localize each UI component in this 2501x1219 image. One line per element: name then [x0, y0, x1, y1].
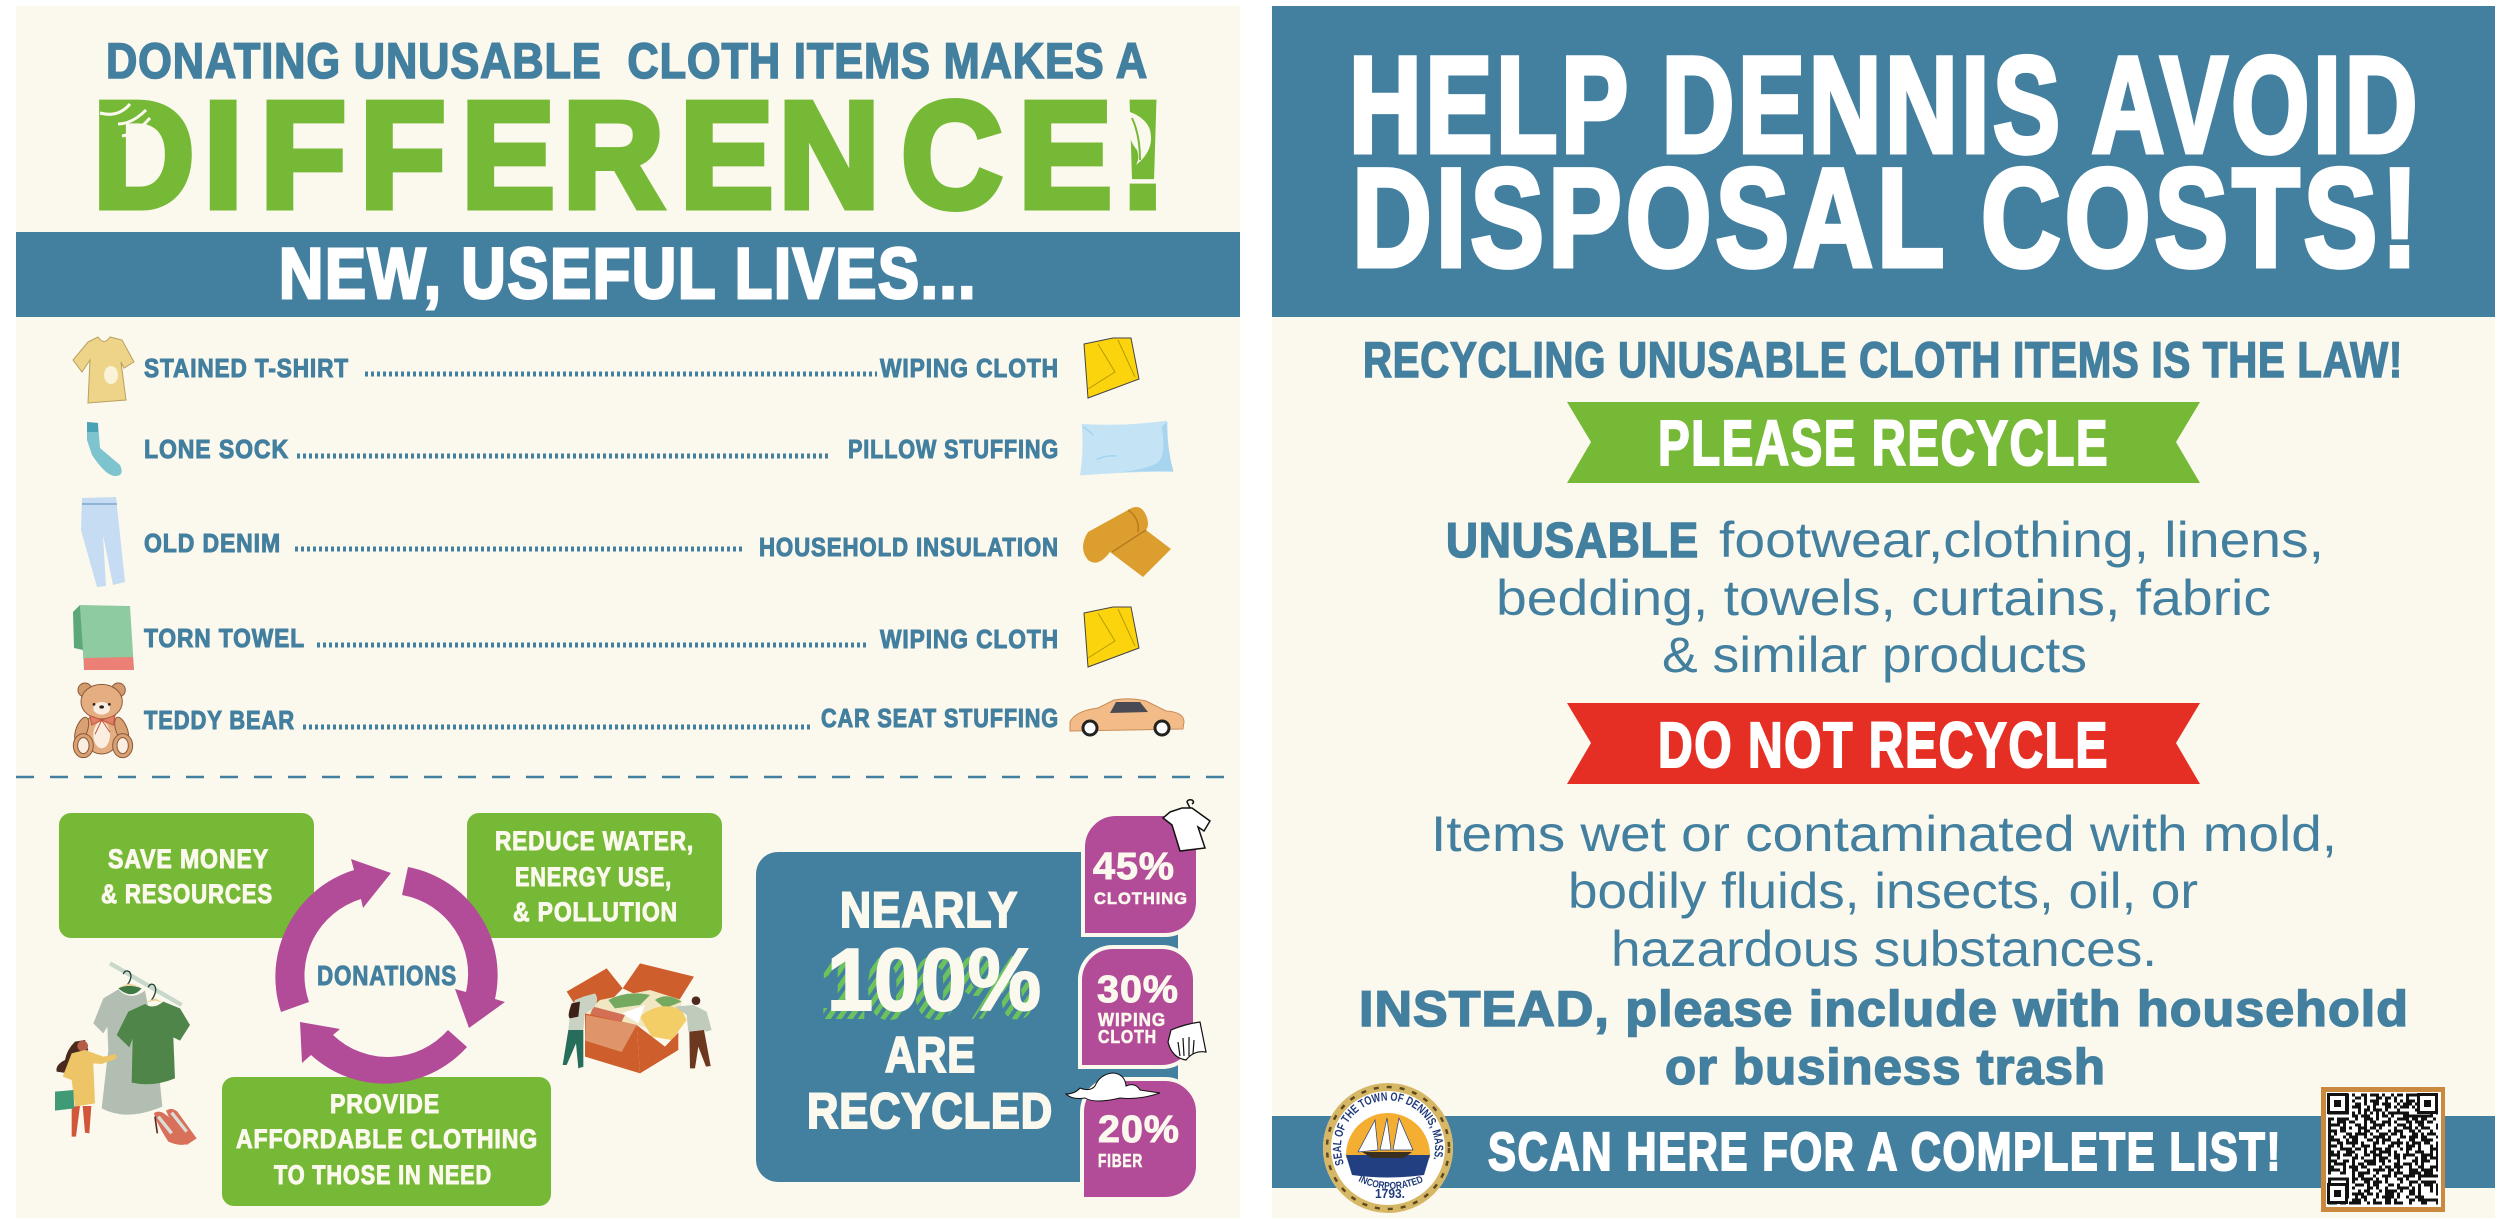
row: old denim to household insulation [81, 497, 1171, 587]
row: teddy bear to car seat stuffing: CAR SEAT STUFFING [821, 703, 1059, 733]
callout: affordable clothing [222, 1077, 551, 1206]
callout: save money [59, 813, 314, 938]
illustration: people filling donation box [563, 963, 712, 1073]
row: torn towel to wiping cloth: WIPING CLOTH [880, 624, 1059, 654]
donations cycle arrows [275, 859, 505, 1084]
text block: recyclable items: footwear,clothing, linens, [1719, 512, 2324, 568]
ribbon: please recycle: PLEASE RECYCLE [1658, 407, 2109, 479]
row: stained t-shirt to wiping cloth: WIPING CLOTH [880, 353, 1059, 383]
icon: pillow [1080, 421, 1173, 475]
stat tab: 30% wiping cloth [1080, 947, 1195, 1067]
icon: yellow cloth [1084, 338, 1139, 398]
callout: affordable clothing: AFFORDABLE CLOTHING [236, 1124, 538, 1154]
seal of the town of dennis: 1793. [1375, 1186, 1405, 1201]
text block: recyclable items: UNUSABLE [1446, 514, 1699, 568]
heading: donating unusable cloth items: DONATING UNUSABLE CLOTH ITEMS MAKES A [106, 33, 1148, 89]
stat block: nearly 100% recycled [756, 852, 1178, 1182]
callout: save money: SAVE MONEY [108, 844, 269, 874]
row: torn towel to wiping cloth [73, 605, 1139, 670]
ribbon: please recycle [1567, 402, 2200, 483]
row: old denim to household insulation: HOUSEHOLD INSULATION [759, 532, 1059, 562]
text block: instead, household trash [1359, 981, 2409, 1095]
callout: affordable clothing: PROVIDE [330, 1089, 440, 1119]
stat tab: 20% fiber: FIBER [1098, 1151, 1143, 1171]
qr code [2321, 1087, 2445, 1212]
text block: recyclable items: bedding, towels, curtains, fabric [1496, 570, 2271, 626]
banner: new, useful lives: NEW, USEFUL LIVES... [279, 235, 977, 314]
big number: 100%: 100% [819, 938, 1034, 1037]
ribbon: do not recycle: DO NOT RECYCLE [1658, 709, 2109, 781]
stat block: nearly 100% recycled: RECYCLED [807, 1083, 1053, 1139]
stat tab: 30% wiping cloth: 30% [1097, 969, 1179, 1011]
icon: shirt on hanger [1163, 800, 1210, 851]
icon: hand on cloth [1168, 1022, 1206, 1060]
text block: non-recyclable items: bodily fluids, insects, oil, or [1568, 863, 2198, 919]
stat block: nearly 100% recycled: NEARLY [840, 882, 1018, 938]
callout: reduce water: ENERGY USE, [515, 862, 672, 892]
callout: save money: & RESOURCES [101, 879, 273, 909]
icon: teddy bear [72, 683, 133, 758]
seal of the town of dennis: SEAL OF THE TOWN OF DENNIS, MASS. [1332, 1092, 1444, 1166]
text block: instead, household trash: or business trash [1665, 1039, 2106, 1095]
panel: donating makes a difference [16, 6, 1240, 1218]
icon: car [1070, 699, 1184, 735]
callout: reduce water: REDUCE WATER, [495, 826, 694, 856]
row: stained t-shirt to wiping cloth [73, 337, 1139, 403]
stat tab: 20% fiber [1082, 1079, 1198, 1199]
stat tab: 30% wiping cloth: WIPING [1098, 1010, 1166, 1030]
icon: towel [73, 605, 134, 670]
stat tab: 30% wiping cloth: CLOTH [1098, 1027, 1157, 1047]
big number: 100%: 100% [827, 930, 1042, 1029]
stat tab: 45% clothing: 45% [1093, 846, 1175, 888]
icon: insulation roll [1083, 507, 1171, 577]
seal of the town of dennis [1323, 1083, 1453, 1213]
callout: reduce water: & POLLUTION [513, 897, 678, 927]
text block: non-recyclable items: hazardous substances. [1611, 921, 2157, 977]
icon: jeans [81, 497, 125, 587]
illustration: shopper with clothes rack [55, 963, 197, 1145]
row: teddy bear to car seat stuffing: TEDDY BEAR [144, 705, 295, 735]
row: teddy bear to car seat stuffing [72, 683, 1184, 758]
row: lone sock to pillow stuffing: PILLOW STUFFING [848, 434, 1059, 464]
panel: help dennis avoid disposal costs [1272, 6, 2495, 1218]
icon: fiber cloud [1066, 1073, 1160, 1101]
row: lone sock to pillow stuffing: LONE SOCK [144, 434, 289, 464]
callout: affordable clothing: TO THOSE IN NEED [274, 1160, 492, 1190]
stat tab: 20% fiber: 20% [1098, 1109, 1180, 1151]
footer banner: scan here: SCAN HERE FOR A COMPLETE LIST! [1488, 1122, 2282, 1182]
text block: recyclable items [1446, 512, 2324, 683]
text block: non-recyclable items [1431, 806, 2337, 977]
icon: stained t-shirt [73, 337, 134, 403]
callout: reduce water [467, 813, 722, 938]
seal of the town of dennis: INCORPORATED [1358, 1176, 1422, 1189]
label: donations: DONATIONS [317, 960, 457, 991]
stat tab: 45% clothing: CLOTHING [1094, 889, 1188, 908]
title: difference: DIFFERENCE! [93, 70, 1166, 239]
footer banner: scan here [1272, 1116, 2495, 1188]
title banner [1272, 6, 2495, 317]
row: torn towel to wiping cloth: TORN TOWEL [144, 623, 305, 653]
stat tab: 45% clothing [1083, 814, 1198, 935]
row: lone sock to pillow stuffing [87, 421, 1173, 476]
text block: recyclable items: & similar products [1662, 627, 2087, 683]
icon: yellow cloth [1084, 607, 1139, 667]
text block: non-recyclable items: Items wet or contaminated with mold, [1431, 806, 2337, 862]
row: old denim to household insulation: OLD DENIM [144, 528, 281, 558]
icon: sock [87, 422, 122, 476]
stat block: nearly 100% recycled: ARE [885, 1027, 976, 1083]
row: stained t-shirt to wiping cloth: STAINED T-SHIRT [144, 353, 349, 383]
text block: instead, household trash: INSTEAD, please include with household [1359, 981, 2409, 1037]
banner: new, useful lives [16, 232, 1240, 317]
